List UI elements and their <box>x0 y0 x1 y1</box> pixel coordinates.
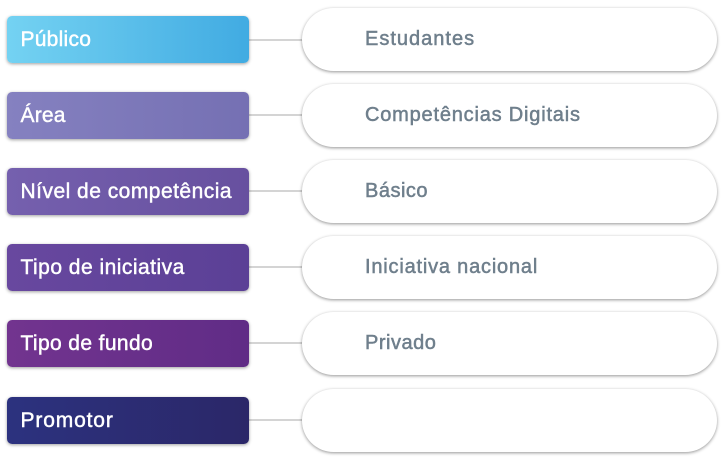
label: Nível de competência: Nível de competência <box>20 180 232 203</box>
label: Público <box>7 16 249 63</box>
label: Promotor: Promotor <box>20 409 114 432</box>
label: Área <box>7 92 249 139</box>
row: Público <box>5 7 719 74</box>
label: Tipo de fundo <box>7 320 249 367</box>
value: Iniciativa nacional <box>302 236 717 299</box>
label: Tipo de fundo: Tipo de fundo <box>20 332 153 355</box>
value: Iniciativa nacional: Iniciativa nacional <box>365 256 538 278</box>
value: Privado <box>302 312 717 375</box>
value: Privado: Privado <box>365 332 436 354</box>
value: Básico <box>302 160 717 223</box>
row: Tipo de fundo <box>5 311 719 378</box>
label: Promotor <box>7 397 249 444</box>
value: Competências Digitais: Competências Digitais <box>365 104 581 126</box>
value: empty <box>302 389 717 452</box>
row: Nível de competência <box>5 159 719 226</box>
value: Competências Digitais <box>302 84 717 147</box>
label: Área: Área <box>20 104 66 127</box>
row: Tipo de iniciativa <box>5 235 719 302</box>
value: Estudantes: Estudantes <box>365 28 475 50</box>
label: Tipo de iniciativa: Tipo de iniciativa <box>20 256 185 279</box>
value: Básico: Básico <box>365 180 428 202</box>
label: Tipo de iniciativa <box>7 244 249 291</box>
label: Nível de competência <box>7 168 249 215</box>
value: Estudantes <box>302 8 717 71</box>
row: Promotor <box>5 388 719 455</box>
row: Área <box>5 83 719 150</box>
label: Público: Público <box>20 28 91 51</box>
